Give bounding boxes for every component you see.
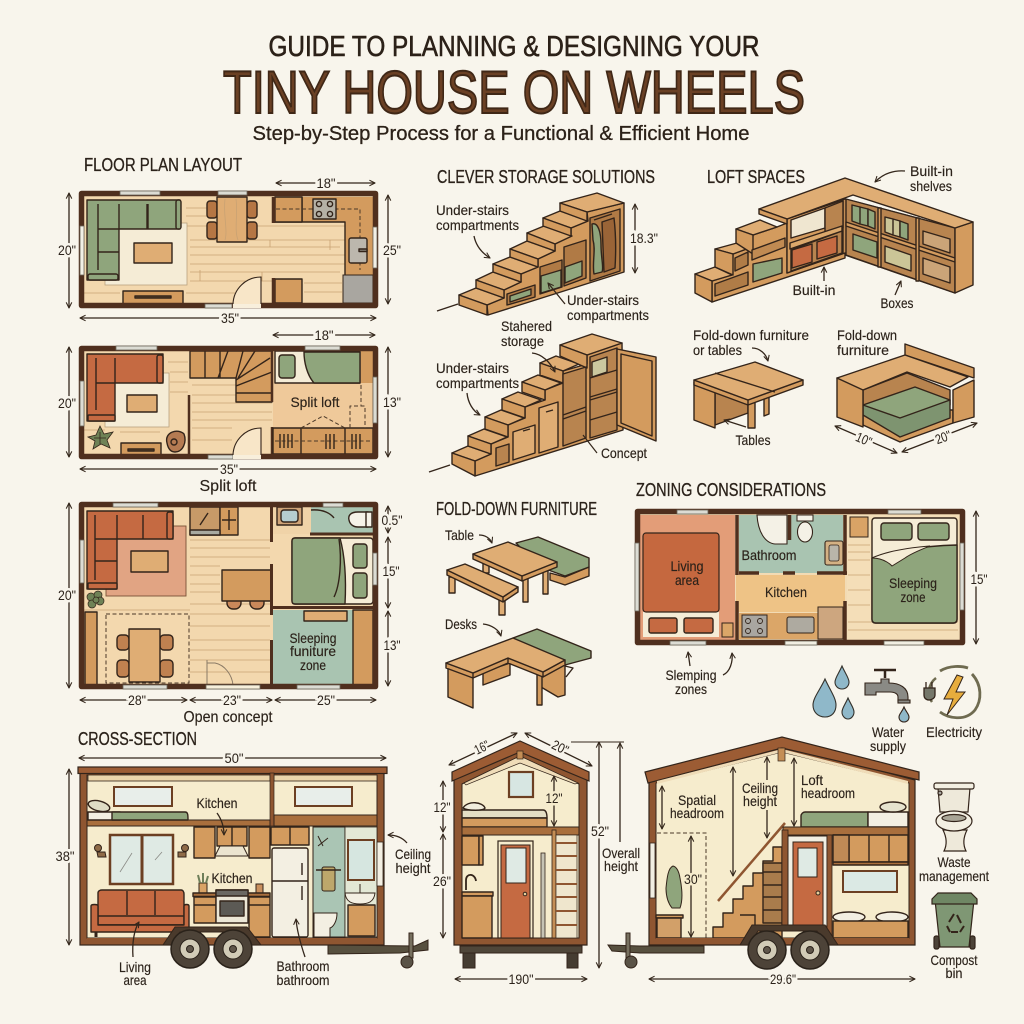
coffee table	[134, 243, 172, 263]
loft windows	[114, 787, 352, 806]
outer walls	[82, 504, 376, 686]
trailer tongue	[328, 933, 428, 968]
kitchen counters	[275, 197, 373, 303]
label: waste management: management	[919, 868, 989, 884]
label: stahered storage	[501, 318, 555, 372]
label: bathroom	[276, 919, 330, 988]
outer walls	[82, 194, 376, 306]
label: built-in shelves	[875, 163, 953, 194]
label: slemping zones	[666, 652, 732, 697]
base and feet	[460, 946, 582, 968]
label: overall height: Overall	[602, 845, 640, 861]
outer walls	[82, 348, 376, 456]
annotations: side elevation: 30"	[684, 872, 702, 887]
fridge	[272, 848, 308, 937]
dining table and chairs	[207, 197, 257, 242]
zone: living area: Living	[670, 558, 704, 574]
stove	[313, 199, 336, 219]
lower bed and base cabinet	[833, 912, 908, 938]
range hood	[215, 846, 248, 856]
floor	[656, 938, 909, 940]
ladder	[552, 830, 577, 938]
label: stahered storage: storage	[501, 333, 544, 349]
dimensions: plan three: 13"	[384, 638, 401, 653]
plant	[87, 591, 104, 608]
label: built-in: Built-in	[792, 282, 836, 298]
dimensions: plan two: 35"	[220, 462, 238, 477]
upper cabinets	[833, 835, 908, 865]
label: split loft: Split loft	[290, 394, 340, 410]
label: living area: area	[124, 972, 147, 988]
sleeping furniture zone: funiture	[290, 643, 336, 659]
icon: toilet	[934, 783, 974, 851]
handrail	[718, 823, 785, 901]
loft floor	[462, 827, 579, 835]
dimensions: plan one	[58, 176, 401, 326]
heading: loft spaces: LOFT SPACES	[707, 167, 805, 187]
dimensions: plan one: 20"	[58, 243, 76, 258]
heading: floor plan layout: FLOOR PLAN LAYOUT	[84, 155, 242, 175]
label: under-stairs compartments upper left	[436, 202, 519, 258]
illustration: trailer cross-section	[78, 767, 428, 968]
dimensions: plan three: 28"	[128, 693, 146, 708]
counter and faucet	[462, 875, 493, 938]
rug	[105, 223, 187, 285]
dimensions: end elevation: 12"	[434, 800, 451, 815]
loft bed	[275, 351, 373, 383]
label: under-stairs compartments	[436, 360, 519, 415]
sink	[349, 238, 367, 263]
label: kitchen lower: Kitchen	[212, 870, 252, 886]
illustration: loft shelving unit	[695, 178, 973, 302]
caption: split loft: Split loft	[200, 478, 257, 495]
label: compost bin: Compost	[930, 952, 978, 968]
dimensions: end elevation: 20"	[549, 737, 571, 758]
lower room window	[843, 871, 897, 892]
label: slemping zones: Slemping	[666, 667, 716, 683]
dimensions: end elevation: 16"	[472, 737, 492, 758]
label: overall height: height	[604, 858, 638, 874]
loft bed	[801, 802, 908, 827]
dimension: 15 inches	[970, 511, 988, 644]
loft floors	[87, 815, 377, 826]
dimension: 18.3 inches	[630, 204, 658, 273]
dimensions: plan three: 25"	[317, 693, 335, 708]
main title: TINY HOUSE ON WHEELS	[223, 59, 805, 126]
label: boxes: Boxes	[880, 295, 914, 311]
coffee table	[131, 551, 168, 572]
dresser	[123, 291, 183, 304]
sleeping furniture zone: zone	[300, 657, 326, 673]
dimension: 18.3 inches: 18.3"	[630, 231, 658, 246]
windows	[635, 510, 964, 645]
zone: living area	[640, 515, 735, 640]
coffee table	[127, 395, 157, 412]
zone: living area: area	[675, 572, 699, 588]
label: stahered storage: Stahered	[501, 318, 552, 334]
panel: zoning plan	[635, 510, 964, 645]
dimensions: plan three: 15"	[382, 564, 400, 579]
caption: open concept: Open concept	[184, 709, 273, 726]
floor	[87, 938, 377, 940]
label: bathroom: Bathroom	[276, 958, 330, 974]
illustration: end elevation	[452, 741, 589, 968]
dimensions: plan three	[58, 503, 403, 708]
sleeping furniture zone: Sleeping	[290, 630, 336, 646]
annotations: side elevation: Spatial	[678, 792, 716, 808]
dimensions: end elevation: 52"	[591, 824, 609, 839]
rug	[105, 373, 169, 427]
label: table: Table	[445, 527, 474, 543]
kitchen utensils	[198, 873, 263, 893]
fender	[740, 925, 838, 945]
annotations: side elevation: Ceiling	[742, 780, 778, 796]
zone: bathroom	[739, 515, 843, 573]
label: ceiling height: Ceiling	[395, 846, 431, 862]
illustration: under-stairs storage with compartments	[437, 193, 624, 315]
label: water supply	[870, 724, 906, 754]
dimensions: bed furniture	[835, 423, 977, 453]
dimension: 29.6 inches: 29.6"	[770, 972, 796, 987]
dimensions: plan two: 20"	[58, 396, 76, 411]
dimensions: end elevation: 190"	[508, 972, 534, 987]
label: built-in shelves: shelves	[910, 178, 952, 194]
label: living area	[119, 922, 151, 988]
title block	[223, 31, 805, 145]
zone: sleeping	[847, 515, 959, 640]
armchair	[167, 431, 185, 452]
zone: kitchen	[736, 575, 845, 639]
label: compost bin	[930, 952, 978, 981]
subtitle: Step-by-Step Process for a Functional & Efficient Home	[252, 123, 750, 145]
icon: electricity	[924, 666, 980, 718]
roof	[645, 737, 919, 783]
dimensions: plan two	[58, 328, 401, 477]
zone: sleeping: Sleeping	[889, 575, 937, 591]
walls	[737, 515, 847, 640]
label: waste management	[919, 854, 989, 884]
wall sconces	[94, 844, 188, 857]
dimensions: plan one: 18"	[316, 176, 336, 191]
annotations: side elevation	[662, 757, 855, 937]
loft floor	[783, 827, 908, 835]
sofa	[87, 200, 181, 280]
illustration: side elevation	[608, 737, 919, 969]
rug	[106, 526, 186, 596]
right wall window	[377, 842, 383, 886]
dimensions: end elevation	[433, 733, 624, 987]
door	[498, 841, 533, 938]
dimensions: end elevation: 12"	[546, 791, 563, 806]
bathroom	[313, 827, 377, 937]
label: fold-down furniture or tables: or tables	[693, 342, 742, 358]
icon: faucet	[865, 670, 910, 722]
label: under-stairs compartments upper left: compartments	[436, 217, 519, 233]
windows and door	[80, 191, 377, 308]
label: ceiling height	[388, 835, 431, 876]
dimension: 50 inches: 50"	[224, 751, 244, 766]
label: built-in shelves: Built-in	[910, 163, 953, 179]
label: fold-down furniture: furniture	[837, 342, 889, 358]
dresser	[121, 443, 161, 455]
dimensions: bed furniture: 10"	[853, 429, 874, 450]
label: ceiling height: height	[396, 860, 431, 876]
interior door swing	[207, 660, 233, 685]
label: living area: Living	[119, 959, 151, 975]
panel: floor plan three	[80, 503, 377, 689]
plant	[88, 426, 113, 449]
illustration: stair cabinet with open door	[429, 334, 656, 476]
dimensions: plan one: 35"	[221, 311, 239, 326]
label: compost bin: bin	[946, 965, 962, 981]
kitchen lower cabinets and stove	[193, 890, 270, 937]
sleeping furniture zone	[273, 610, 373, 685]
label: overall height	[602, 845, 640, 874]
kitchen island with stools	[222, 570, 271, 609]
zone: kitchen: Kitchen	[765, 584, 807, 600]
label: fold-down furniture or tables	[693, 327, 809, 361]
dimensions: plan three: 20"	[58, 588, 76, 603]
loft bed	[462, 803, 547, 827]
stairs	[190, 351, 272, 402]
annotations: side elevation: height	[743, 793, 777, 809]
label: built-in	[792, 267, 836, 298]
dimensions: plan one: 25"	[383, 243, 401, 258]
dimension: 38 inches: 38"	[56, 849, 75, 864]
label: under-stairs compartments upper left: Under-stairs	[436, 202, 509, 218]
label: waste management: Waste	[938, 854, 971, 870]
panel: floor plan one	[80, 191, 377, 308]
illustration: table with bench and cushion	[447, 537, 589, 615]
wheels	[748, 931, 829, 969]
upper cabinets	[194, 827, 309, 858]
roof	[452, 741, 589, 781]
icon: compost bin	[932, 893, 977, 949]
staircase	[713, 847, 782, 938]
label: boxes	[880, 281, 914, 311]
sofa	[87, 511, 173, 589]
loft bed	[87, 798, 188, 820]
bed	[292, 538, 373, 604]
cabinet	[462, 836, 483, 865]
annotations: side elevation: Loft	[801, 772, 823, 788]
wheels	[171, 930, 252, 968]
label: slemping zones: zones	[675, 681, 707, 697]
label: water supply: Water	[872, 724, 904, 740]
closet zone	[657, 833, 706, 938]
heading: zoning considerations: ZONING CONSIDERATIONS	[636, 480, 826, 500]
windows	[80, 503, 377, 689]
label: tables	[724, 420, 770, 448]
label: under-stairs compartments: Under-stairs	[436, 360, 509, 376]
label: under-stairs compartments lower right	[548, 283, 649, 323]
tongue and jack	[608, 933, 704, 968]
door	[782, 830, 832, 938]
annotations: side elevation: headroom	[670, 805, 724, 821]
dimensions: plan three: 0.5"	[382, 513, 403, 528]
fender	[163, 927, 261, 945]
upper cabinets	[190, 507, 238, 535]
label: concept: Concept	[601, 445, 647, 461]
roof	[78, 767, 387, 774]
illustration: fold-down bed furniture	[837, 344, 974, 442]
dimensions: bed furniture: 20"	[933, 428, 953, 447]
gable window	[509, 772, 533, 797]
title line one: GUIDE TO PLANNING & DESIGNING YOUR	[268, 31, 760, 63]
windows and door	[80, 346, 377, 459]
partition wall	[189, 351, 272, 454]
heading: clever storage solutions: CLEVER STORAGE SOLUTIONS	[437, 167, 655, 187]
loft storage	[273, 385, 373, 454]
heading: fold-down furniture: FOLD-DOWN FURNITURE	[436, 499, 597, 519]
label: under-stairs compartments lower right: compartments	[567, 307, 649, 323]
dimensions: plan three: 23"	[223, 693, 241, 708]
bench	[656, 915, 683, 938]
panel: floor plan two	[80, 346, 377, 459]
label: under-stairs compartments: compartments	[436, 375, 519, 391]
partition walls	[272, 197, 275, 303]
label: kitchen top: Kitchen	[196, 795, 238, 811]
sofa	[91, 890, 189, 937]
label: kitchen top	[196, 795, 238, 835]
label: fold-down furniture	[837, 327, 897, 358]
large window	[110, 835, 173, 884]
illustration: desk with cushion	[446, 629, 591, 708]
label: desks: Desks	[445, 616, 477, 632]
sofa	[87, 354, 163, 421]
label: desks	[445, 616, 501, 636]
icon: water drops	[813, 666, 854, 719]
label: electricity: Electricity	[926, 724, 982, 740]
label: fold-down furniture: Fold-down	[837, 327, 897, 343]
coat	[666, 866, 682, 908]
dimensions: plan two: 18"	[314, 328, 334, 343]
dimensions: plan two: 13"	[383, 395, 401, 410]
partition walls	[271, 507, 373, 685]
dimension: 15 inches: 15"	[970, 572, 988, 587]
label: water supply: supply	[870, 738, 906, 754]
label: under-stairs compartments lower right: Under-stairs	[567, 292, 639, 308]
zone: sleeping: zone	[900, 589, 926, 605]
annotations: side elevation: headroom	[801, 785, 855, 801]
bathroom	[273, 507, 373, 534]
dimensions: end elevation: 26"	[433, 874, 451, 889]
label: bathroom: bathroom	[276, 972, 330, 988]
illustration: fold-down table	[694, 362, 803, 428]
dining area	[85, 612, 189, 685]
label: fold-down furniture or tables: Fold-down furniture	[693, 327, 809, 343]
fridge edge	[541, 853, 545, 938]
label: tables: Tables	[736, 432, 770, 448]
side window	[650, 843, 655, 898]
label: concept	[583, 435, 647, 461]
zone: bathroom: Bathroom	[742, 547, 796, 563]
heading: cross-section: CROSS-SECTION	[78, 729, 197, 749]
